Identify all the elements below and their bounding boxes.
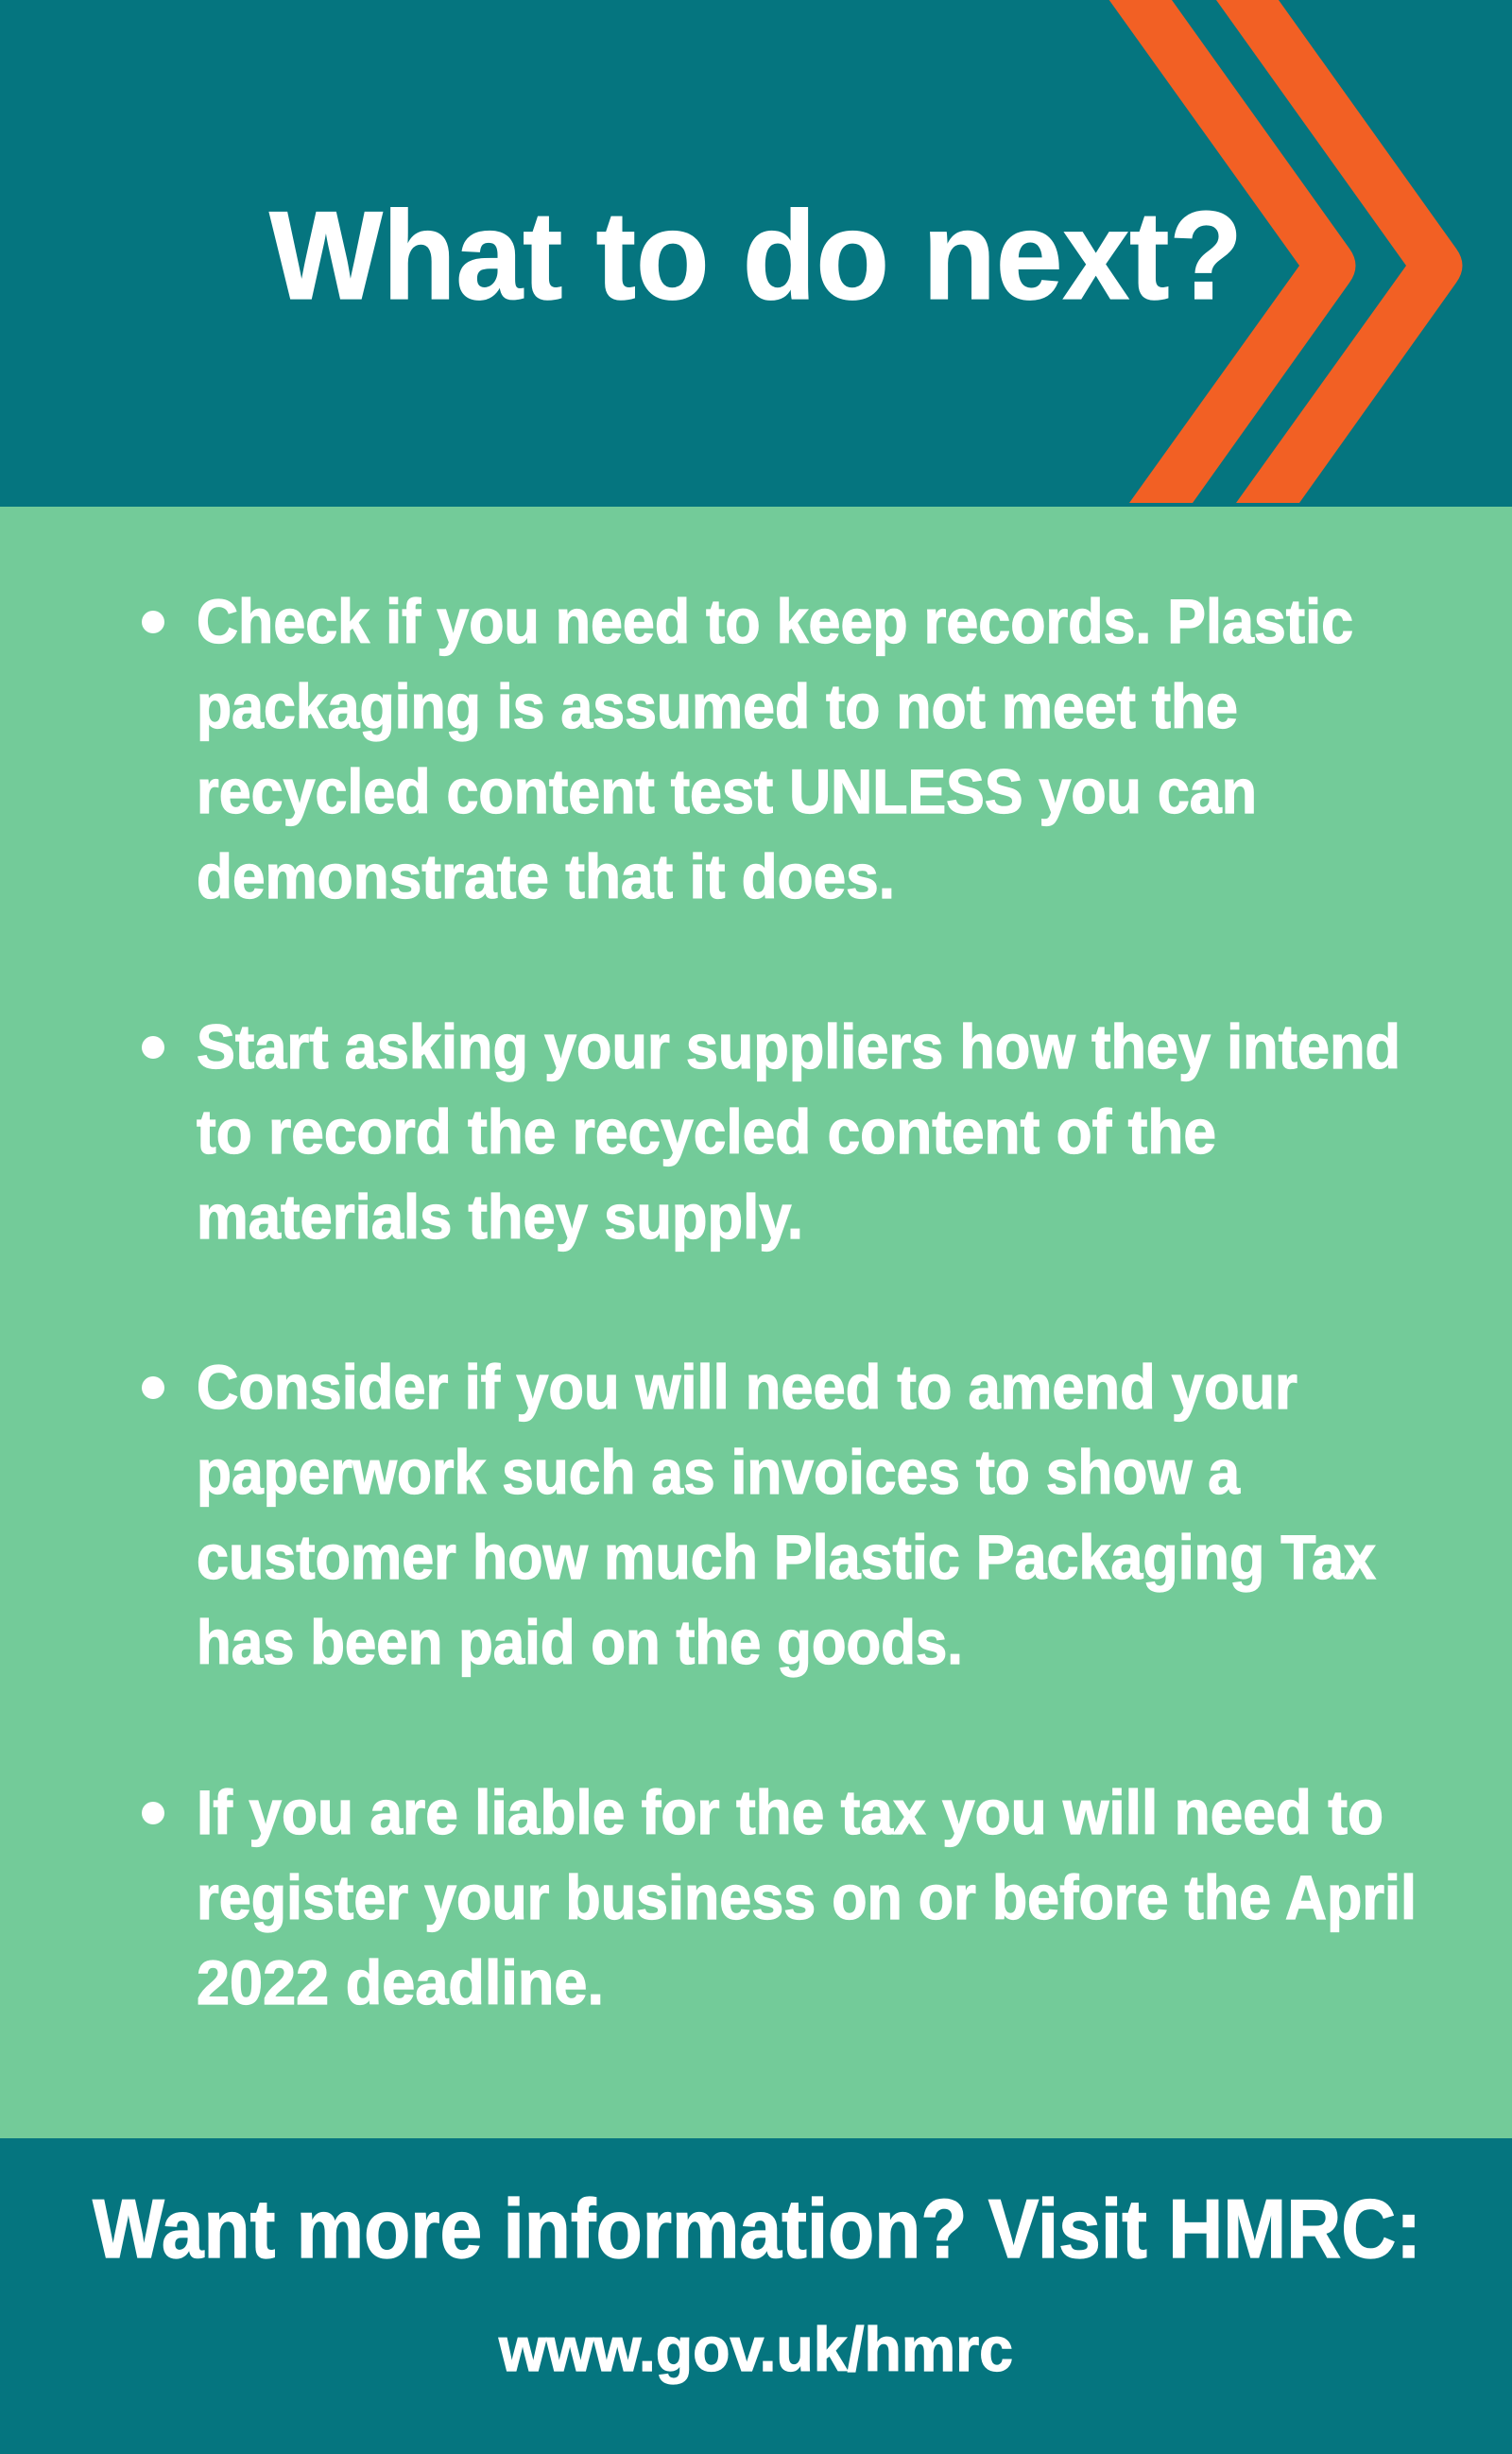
list item: amend paperwork: customer how much Plastic Packaging Tax — [197, 1522, 1376, 1592]
list item: register business — [142, 1777, 1417, 2017]
icon: double chevron arrow — [1109, 0, 1463, 503]
list item: keep records: demonstrate that it does. — [197, 841, 895, 911]
list item: amend paperwork: has been paid on the goods. — [197, 1607, 963, 1677]
list item: register business: If you are liable for the tax you will need to — [197, 1777, 1383, 1847]
title: What to do next? — [269, 186, 1243, 326]
list item: amend paperwork — [142, 1352, 1376, 1677]
list item: amend paperwork: Consider if you will need to amend your — [197, 1352, 1297, 1422]
list item: keep records: packaging is assumed to not meet the — [197, 671, 1238, 741]
list item: keep records — [142, 586, 1353, 911]
panel: footer — [0, 2138, 1512, 2454]
list item: ask suppliers — [142, 1011, 1400, 1252]
list item: ask suppliers: materials they supply. — [197, 1182, 803, 1252]
panel: action list — [0, 507, 1512, 2138]
footer heading: Want more information? Visit HMRC: — [93, 2182, 1421, 2275]
list item: register business: register your business on or before the April — [197, 1862, 1417, 1932]
list item: ask suppliers: to record the recycled content of the — [197, 1097, 1216, 1167]
list item: keep records: recycled content test UNLESS you can — [197, 756, 1257, 826]
list item: amend paperwork: paperwork such as invoices to show a — [197, 1437, 1241, 1507]
list item: ask suppliers: Start asking your suppliers how they intend — [197, 1011, 1400, 1081]
footer link: www.gov.uk/hmrc — [498, 2314, 1013, 2384]
list item: register business: 2022 deadline. — [197, 1947, 604, 2017]
list item: keep records: Check if you need to keep records. Plastic — [197, 586, 1353, 656]
panel: header — [0, 0, 1512, 507]
